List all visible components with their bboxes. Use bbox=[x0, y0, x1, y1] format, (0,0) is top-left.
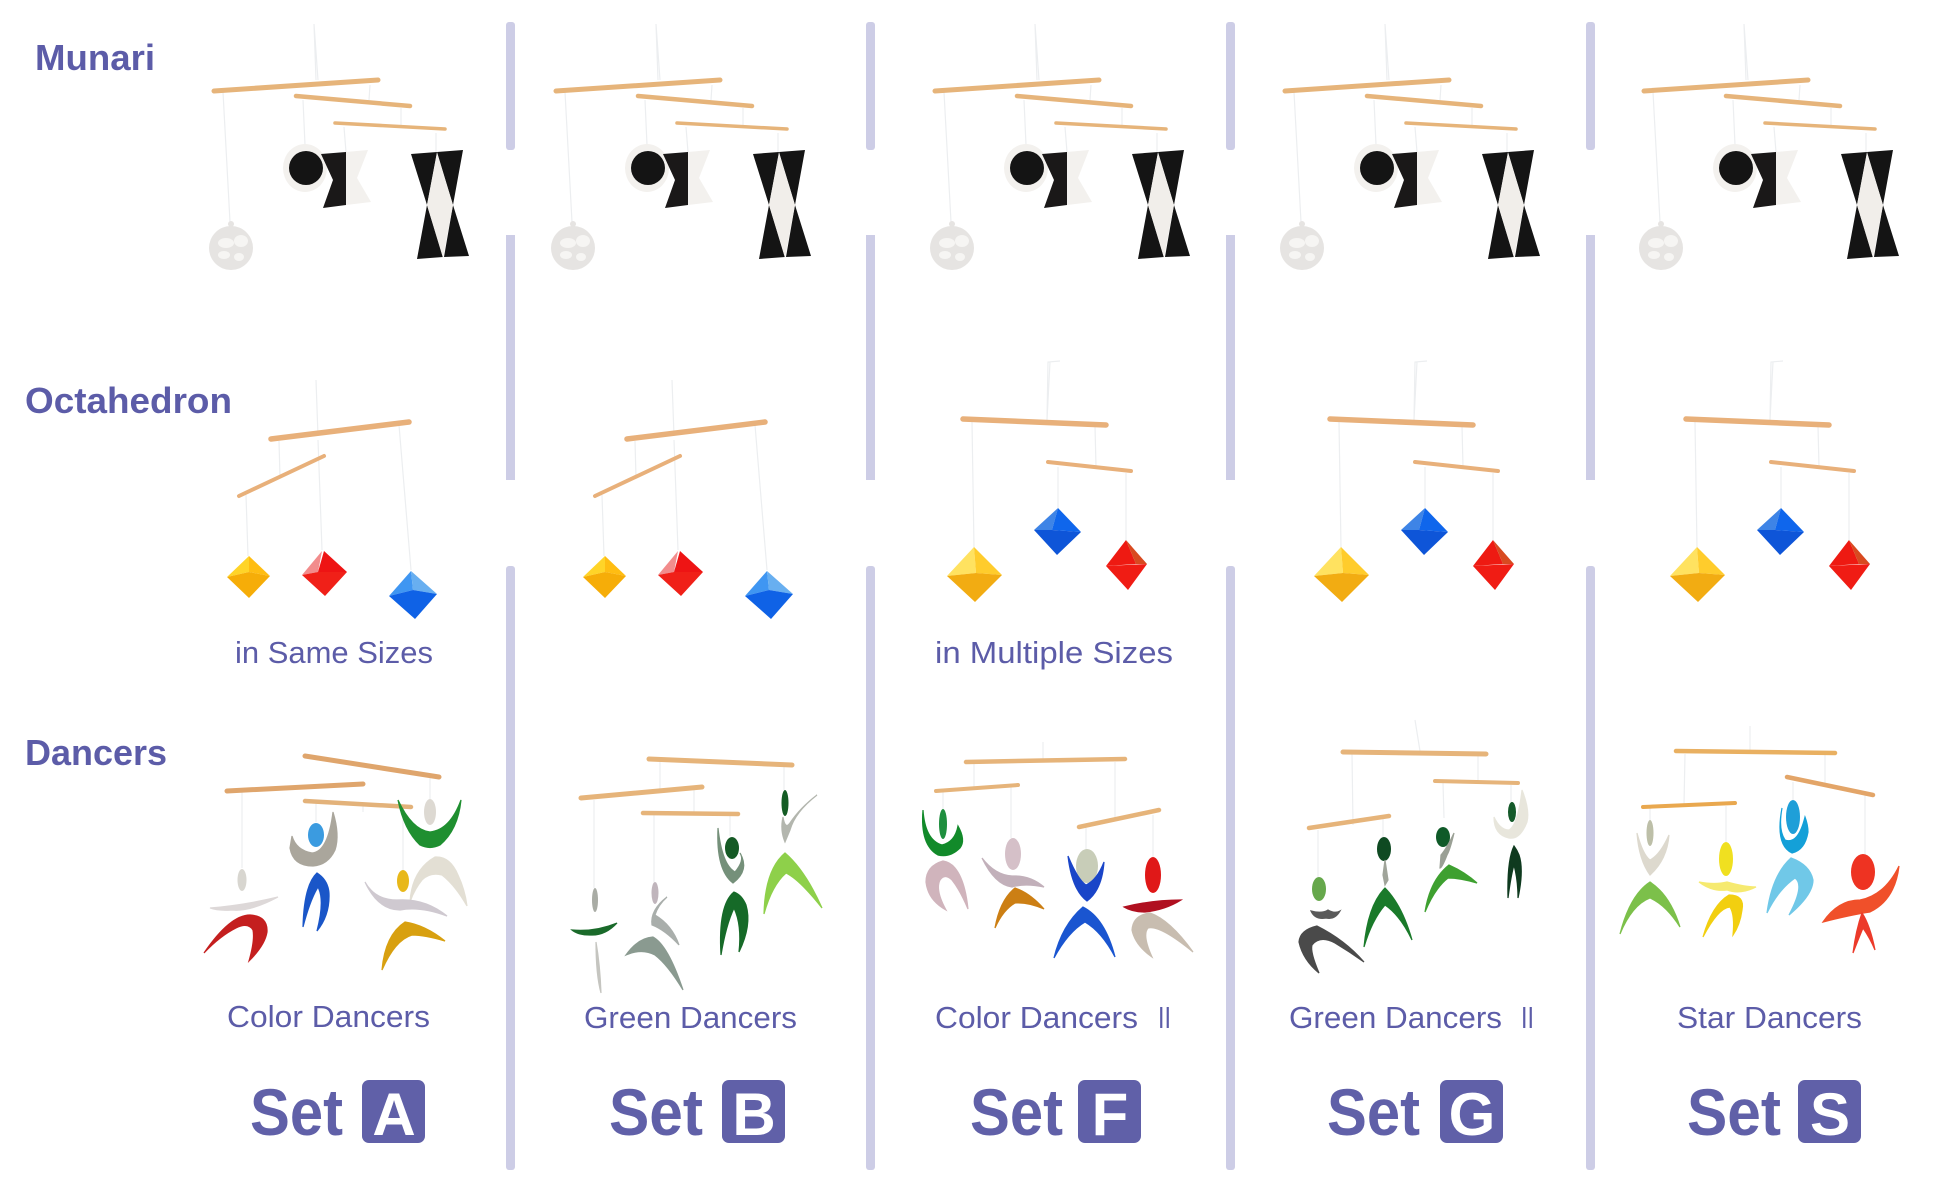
Munari mobile S bbox=[1639, 24, 1899, 270]
label: Set F: F bbox=[1092, 1081, 1128, 1148]
label: Set S: S bbox=[1810, 1081, 1850, 1148]
label: Set F: Set bbox=[970, 1075, 1063, 1149]
row heading: Dancers: Dancers bbox=[25, 732, 167, 773]
caption: in Multiple Sizes: in Multiple Sizes bbox=[935, 635, 1173, 670]
row heading: Munari: Munari bbox=[35, 37, 155, 78]
label: Set A: Set bbox=[250, 1075, 343, 1149]
Green Dancers II mobile bbox=[1299, 720, 1528, 973]
row heading: Octahedron: Octahedron bbox=[25, 380, 232, 421]
label: Set A: A bbox=[372, 1081, 416, 1148]
caption: Green Dancers: Green Dancers bbox=[584, 1000, 797, 1035]
label: Set A bbox=[250, 1075, 425, 1149]
label: Set B bbox=[609, 1075, 785, 1149]
caption: Green Dancers II: Green Dancers bbox=[1289, 1000, 1502, 1035]
Munari mobile B bbox=[551, 24, 811, 270]
Octahedron mobile B, same sizes bbox=[583, 380, 793, 619]
Munari mobile G bbox=[1280, 24, 1540, 270]
caption: Star Dancers: Star Dancers bbox=[1677, 1000, 1862, 1035]
label: Set S: Set bbox=[1687, 1075, 1781, 1149]
Star Dancers mobile bbox=[1620, 726, 1899, 953]
Octahedron mobile F, multiple sizes bbox=[947, 361, 1147, 602]
Octahedron mobile G, multiple sizes bbox=[1314, 361, 1514, 602]
label: Set S bbox=[1687, 1075, 1861, 1149]
caption: Color Dancers II: Color Dancers bbox=[935, 1000, 1138, 1035]
label: Set B: B bbox=[732, 1081, 776, 1148]
Octahedron mobile A, same sizes bbox=[227, 380, 437, 619]
caption: Green Dancers II: II bbox=[1521, 1000, 1534, 1035]
panel: Set G bbox=[1280, 24, 1540, 1149]
caption: in Same Sizes: in Same Sizes bbox=[235, 635, 433, 670]
Green Dancers mobile bbox=[572, 759, 822, 993]
panel: Set A bbox=[204, 24, 469, 1149]
Octahedron mobile S, multiple sizes bbox=[1670, 361, 1870, 602]
label: Set F bbox=[970, 1075, 1141, 1149]
caption: Color Dancers II: II bbox=[1158, 1000, 1171, 1035]
Munari mobile A bbox=[209, 24, 469, 270]
label: Set B: Set bbox=[609, 1075, 703, 1149]
panel: Set F bbox=[923, 24, 1193, 1149]
label: Set G bbox=[1327, 1075, 1503, 1149]
label: Set G: G bbox=[1449, 1081, 1495, 1148]
Munari mobile F bbox=[930, 24, 1190, 270]
panel: Set B bbox=[551, 24, 822, 1149]
caption: Color Dancers: Color Dancers bbox=[227, 999, 430, 1034]
Color Dancers mobile bbox=[204, 756, 467, 970]
panel: Set S bbox=[1620, 24, 1899, 1149]
column divider bars bbox=[506, 22, 1595, 1170]
Color Dancers II mobile bbox=[923, 742, 1193, 958]
label: Set G: Set bbox=[1327, 1075, 1420, 1149]
